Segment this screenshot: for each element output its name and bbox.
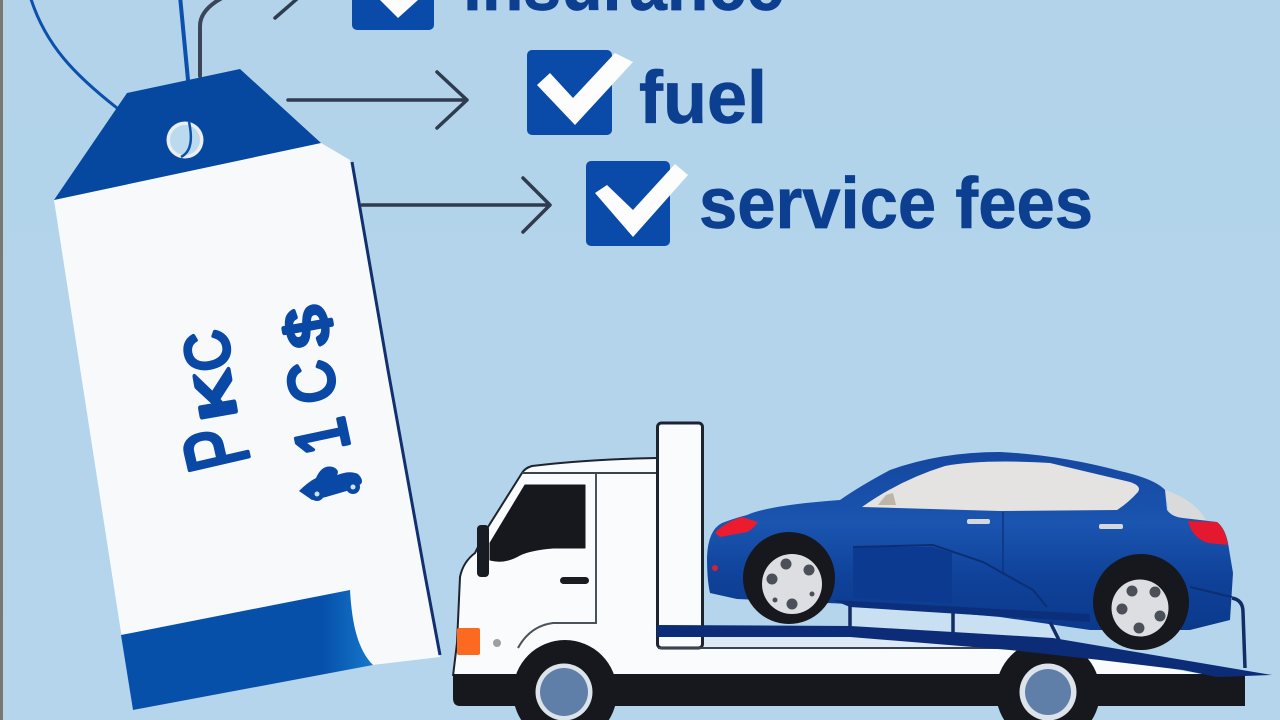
small headlight dot (493, 639, 501, 647)
tag bottom band (121, 590, 373, 710)
car glass (862, 462, 1139, 511)
mirror (477, 525, 489, 577)
truck bed (657, 640, 1210, 676)
tag handwriting left: C (171, 325, 246, 377)
front truck wheel (513, 640, 617, 720)
tag handwriting left (163, 325, 269, 480)
door handle (560, 577, 589, 584)
checkbox: insurance (352, 0, 434, 30)
left frame edge (0, 0, 3, 720)
tag eyelet (166, 122, 204, 158)
tag handwriting right (271, 301, 366, 462)
cab roof line (522, 472, 656, 474)
tag right edge shadow (352, 162, 440, 655)
label: service fees: service fees (699, 164, 1093, 244)
black chassis (453, 674, 1245, 706)
checkbox: service fees (586, 161, 688, 246)
car body (707, 452, 1233, 630)
tag handwriting left: P (163, 417, 269, 480)
front light (715, 517, 758, 537)
dark sill (833, 600, 1090, 622)
bed line (658, 647, 1005, 649)
tag handwriting right: 1 (277, 411, 366, 462)
glass detail (878, 493, 896, 505)
arrow: to service fees (362, 178, 550, 232)
truck cab fill (453, 458, 658, 676)
tag handwriting right: $ (271, 301, 344, 352)
price tag (54, 69, 440, 710)
headboard mast (658, 423, 702, 648)
door handles (967, 519, 990, 524)
tail light (1188, 521, 1228, 545)
light strip under ramp (660, 636, 1010, 647)
checkbox: fuel (527, 50, 633, 135)
arrow: to fuel (288, 72, 467, 128)
tag header (54, 69, 321, 200)
right wheel (1093, 554, 1189, 650)
strings of price tag (30, 0, 222, 108)
rear truck wheel (996, 640, 1100, 720)
arrow: to insurance (275, 0, 298, 18)
tow truck with car (453, 423, 1272, 720)
cab window (490, 485, 585, 561)
car door line (1002, 512, 1004, 575)
ramp (657, 625, 1272, 677)
label: fuel: fuel (639, 56, 767, 139)
tag handwriting left: κ (169, 366, 251, 427)
tag handwriting right: C (273, 355, 351, 409)
flatbed restraint rail (853, 545, 1232, 607)
left wheel (743, 532, 835, 624)
rear window wedge (1165, 490, 1206, 520)
truck cab outline (453, 458, 657, 676)
orange marker light (457, 628, 480, 655)
ramp support struts (850, 598, 1245, 668)
cab door line (518, 474, 596, 648)
light gap under car (850, 607, 1062, 642)
tag body (54, 143, 440, 710)
icon: small car on tag (299, 466, 362, 501)
car (707, 452, 1233, 650)
lower door panel (853, 547, 952, 603)
